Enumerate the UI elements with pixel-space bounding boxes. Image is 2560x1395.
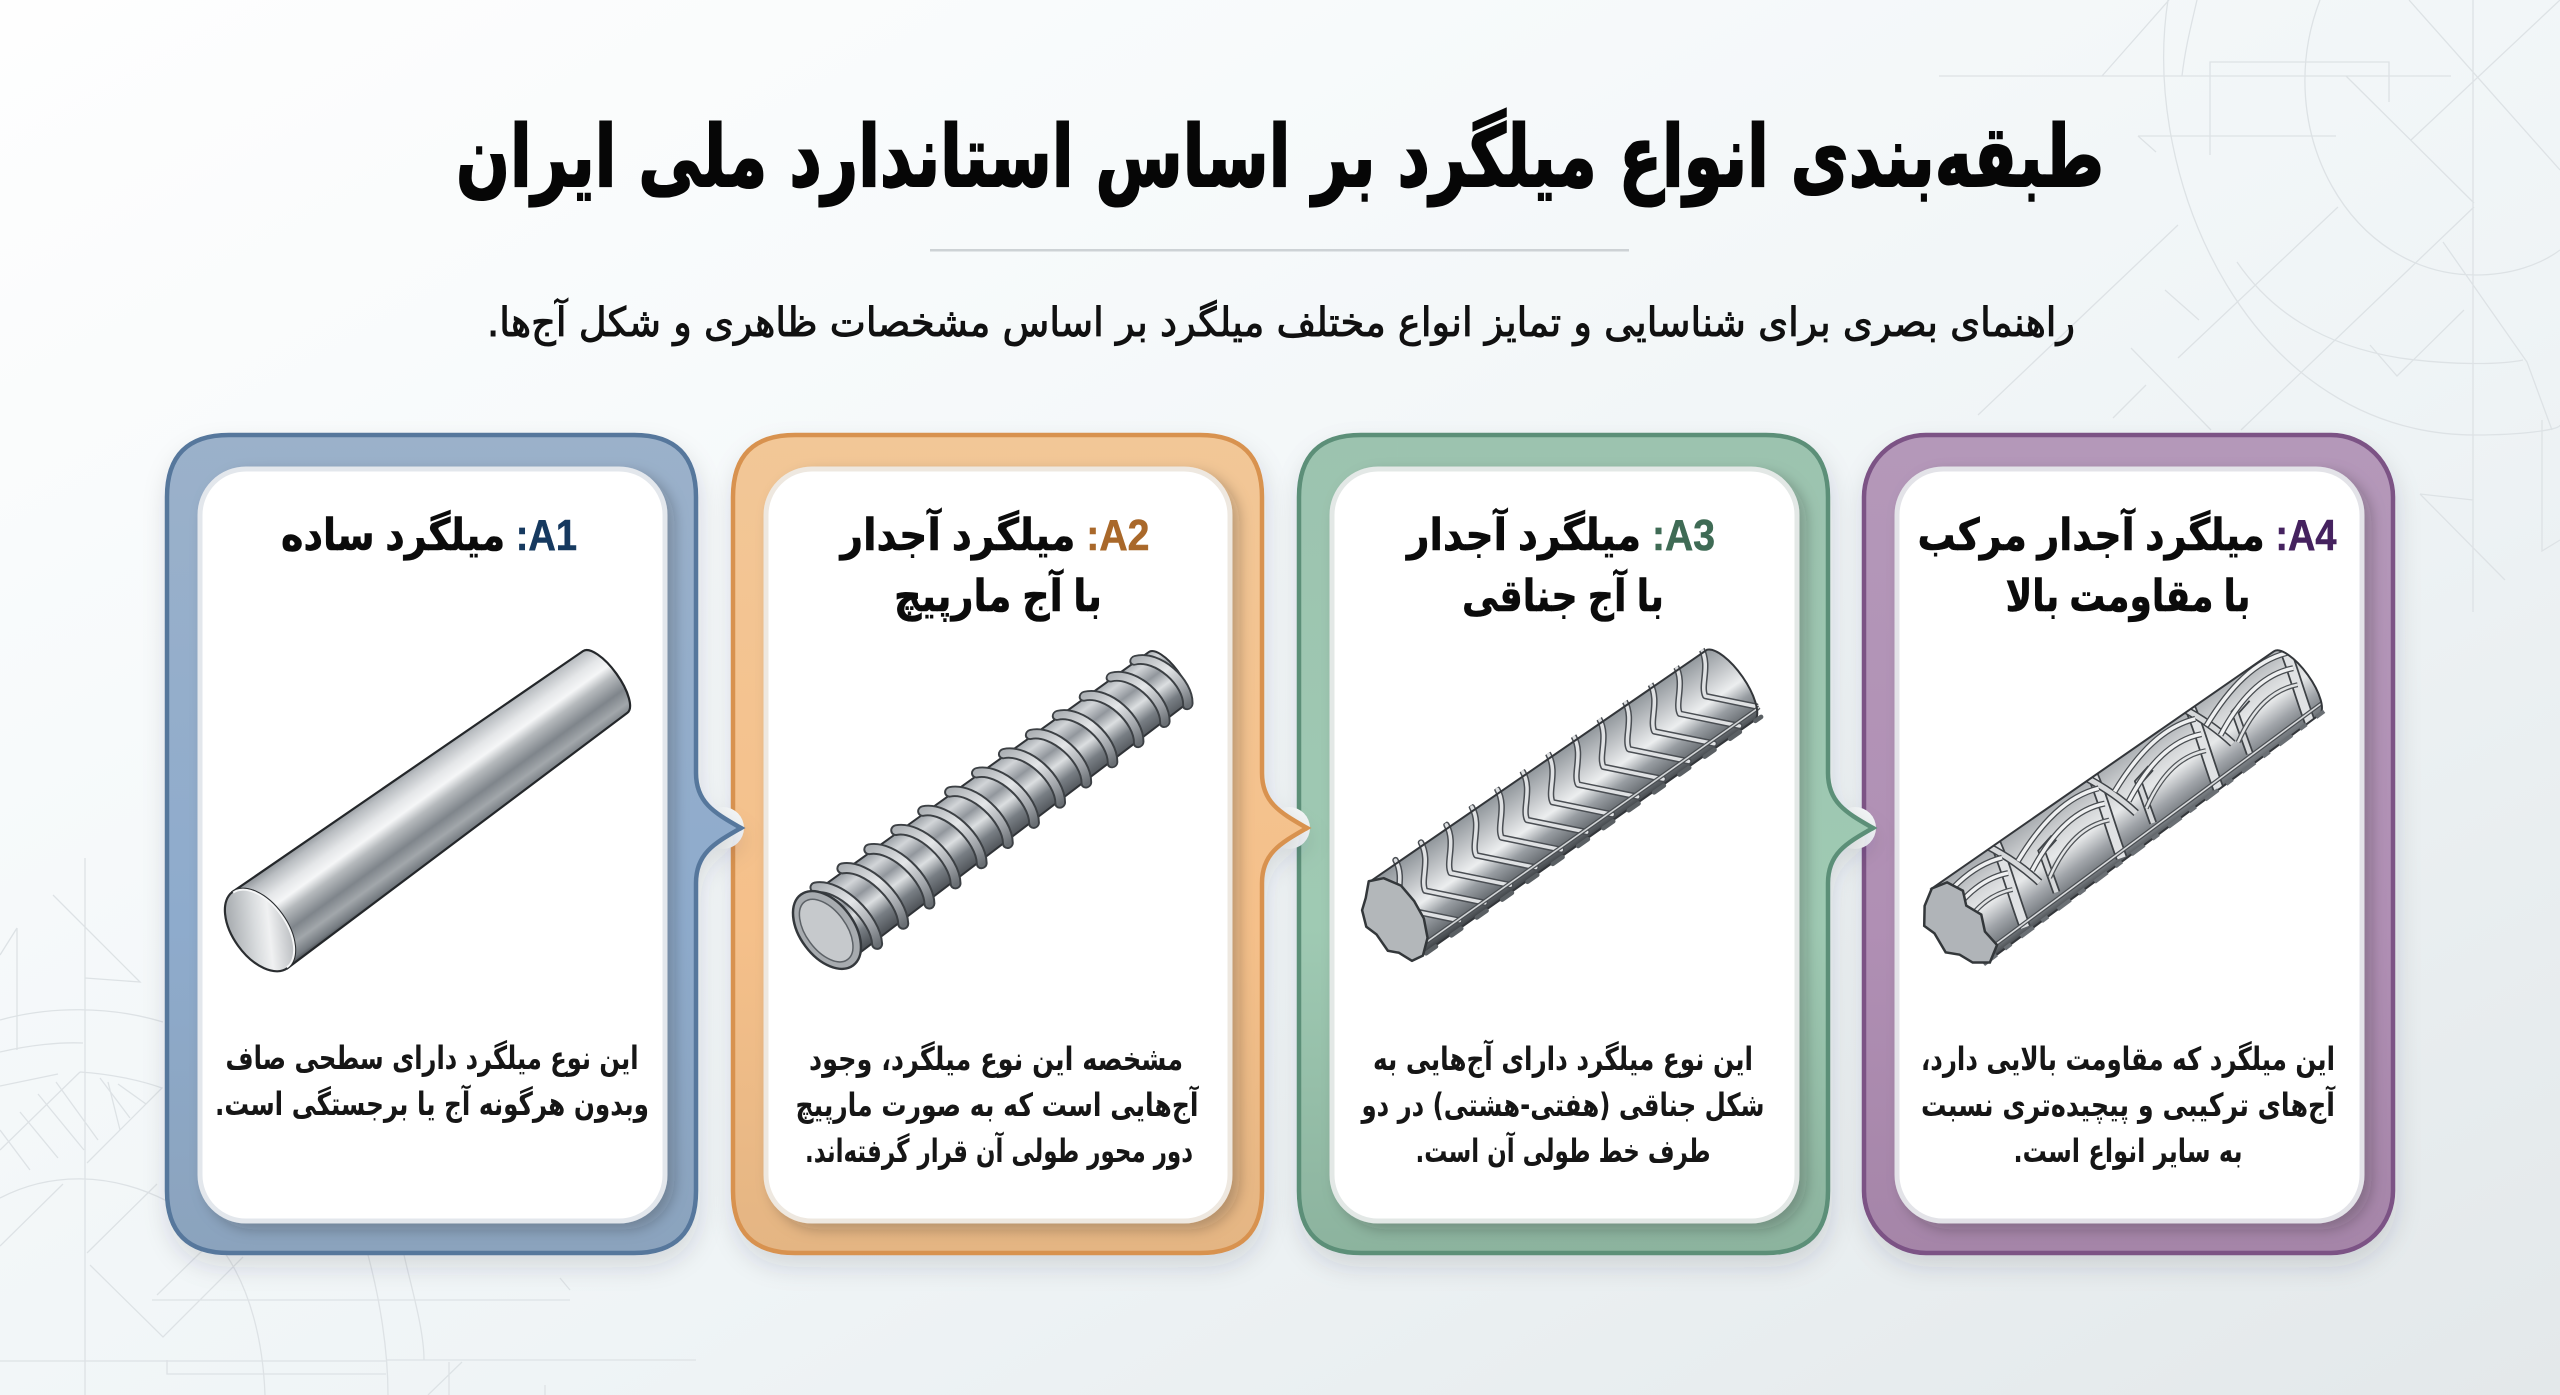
A1 description: وبدون هرگونه آج یا برجستگی است.: [215, 1084, 649, 1123]
background: technical drawing lines top right: [1939, 0, 2560, 612]
A3 white panel: [1332, 469, 1797, 1221]
card A2: [733, 435, 1310, 1253]
A3 description: شکل جناقی (هفتی-هشتی) در دو: [1360, 1086, 1764, 1124]
A3 heading: A3: میلگرد آجدار: [1405, 507, 1715, 561]
A1 description: این نوع میلگرد دارای سطحی صاف: [226, 1039, 638, 1077]
card A3: [1299, 435, 1876, 1253]
rebar A1: plain smooth bar: [211, 636, 644, 984]
rebar A3: chevron ribs: [1360, 648, 1764, 962]
card A4: [1864, 435, 2393, 1253]
A4 description: این میلگرد که مقاومت بالایی دارد،: [1921, 1040, 2335, 1078]
text: با مقاومت بالا: [2006, 572, 2250, 622]
A3 description: طرف خط طولی آن است.: [1416, 1131, 1710, 1170]
A4 frame: [1864, 435, 2393, 1253]
subtitle: راهنمای بصری برای شناسایی و تمایز انواع مختلف میلگرد بر اساس مشخصات ظاهری و شکل آج‌ها.: [487, 298, 2075, 347]
title divider: [930, 249, 1629, 252]
A3 halo: [1834, 807, 1876, 849]
rebar A4: composite ribs: [1922, 649, 2326, 966]
A3 description: [1360, 1039, 1764, 1170]
background: technical drawing lines bottom left: [0, 858, 696, 1395]
A2 description: [796, 1040, 1199, 1170]
card A1: [167, 435, 744, 1253]
text: با آج مارپیچ: [894, 568, 1102, 622]
A2 halo: [1268, 807, 1310, 849]
A3 frame: [1299, 435, 1873, 1253]
A1 heading: A1: میلگرد ساده: [281, 509, 577, 561]
A1 halo: [702, 807, 744, 849]
A2 description: دور محور طولی آن قرار گرفته‌اند.: [805, 1131, 1193, 1170]
A2 heading: A2: میلگرد آجدار: [839, 507, 1150, 561]
A4 description: آج‌های ترکیبی و پیچیده‌تری نسبت: [1921, 1085, 2336, 1124]
rebar A2: spiral ribs: [779, 635, 1204, 981]
A1 frame: [167, 435, 741, 1253]
A3 description: این نوع میلگرد دارای آج‌هایی به: [1373, 1039, 1753, 1078]
A1 white panel: [200, 469, 665, 1221]
A1 description: [215, 1039, 649, 1123]
A4 description: به سایر انواع است.: [2014, 1132, 2242, 1170]
A4 heading: A4: میلگرد آجدار مرکب: [1918, 507, 2337, 561]
A2 description: مشخصه این نوع میلگرد، وجود: [809, 1040, 1183, 1078]
A2 frame: [733, 435, 1307, 1253]
A4 description: [1921, 1040, 2336, 1170]
A2 description: آج‌هایی است که به صورت مارپیچ: [796, 1085, 1199, 1124]
text: با آج جناقی: [1462, 568, 1664, 622]
A4 white panel: [1897, 469, 2362, 1221]
A2 white panel: [766, 469, 1230, 1221]
